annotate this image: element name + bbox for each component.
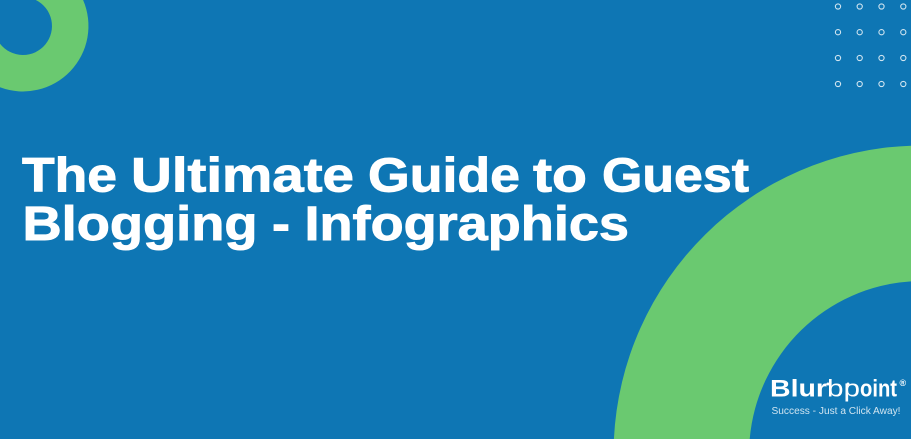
title: Blogging	[22, 197, 258, 251]
logo wordmark: Blur	[770, 376, 827, 402]
logo: Blurbpoint	[770, 376, 906, 417]
title: to	[533, 148, 587, 202]
tagline: Success - Just a Click Away!	[772, 406, 900, 417]
logo wordmark	[770, 376, 897, 402]
registered mark: ®	[900, 378, 906, 388]
dot grid	[835, 4, 906, 87]
title: -	[272, 197, 290, 251]
bottom-right green arc	[614, 146, 911, 439]
logo wordmark: bp	[827, 376, 860, 402]
title: Ultimate	[131, 148, 354, 202]
title: The	[22, 148, 117, 202]
logo wordmark: oint	[860, 376, 897, 402]
title	[22, 148, 749, 251]
title: Guide	[368, 148, 520, 202]
icon: top-left green ring	[0, 0, 88, 91]
title: Guest	[602, 148, 749, 202]
title: Infographics	[304, 197, 629, 251]
